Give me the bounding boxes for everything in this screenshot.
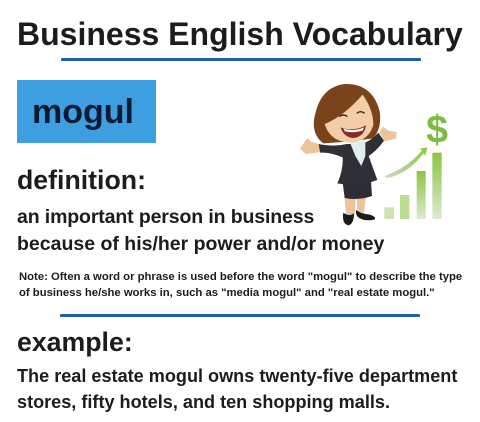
definition text: an important person in business — [17, 206, 314, 228]
definition text — [17, 206, 384, 255]
note text: Note: Often a word or phrase is used before the word "mogul" to describe the type — [19, 271, 462, 283]
icon: dollar sign: $ — [426, 108, 448, 152]
divider line — [60, 314, 420, 317]
title: Business English Vocabulary — [17, 16, 463, 52]
note text: of business he/she works in, such as "media mogul" and "real estate mogul." — [19, 287, 435, 299]
definition text: because of his/her power and/or money — [17, 233, 384, 255]
example text: stores, fifty hotels, and ten shopping malls. — [17, 392, 390, 412]
example text — [17, 366, 458, 412]
illustration: businesswoman with growth chart — [300, 84, 448, 226]
character: businesswoman — [300, 84, 397, 225]
jacket — [318, 133, 384, 185]
heading: definition: definition: — [17, 165, 146, 195]
vocabulary word box — [17, 80, 156, 143]
hair — [314, 84, 380, 143]
mouth — [341, 125, 366, 138]
eyes — [339, 112, 365, 117]
face — [325, 95, 373, 143]
legs — [344, 197, 356, 214]
title underline — [61, 58, 421, 61]
heading: example: example: — [17, 327, 133, 357]
vocabulary word: mogul — [32, 93, 134, 131]
blouse — [350, 141, 365, 166]
icon: growth bars — [384, 153, 442, 219]
shoes — [343, 213, 354, 225]
hands — [300, 138, 320, 154]
note text — [19, 271, 462, 299]
example text: The real estate mogul owns twenty-five department — [17, 366, 457, 386]
skirt — [343, 182, 372, 199]
icon: growth arrow — [384, 147, 427, 178]
